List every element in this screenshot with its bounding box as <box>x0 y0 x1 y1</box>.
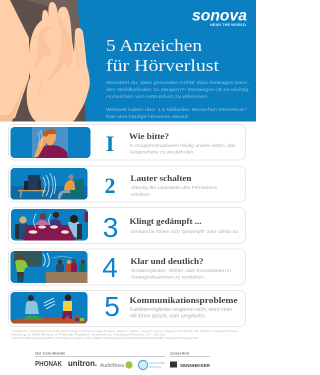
logo: Advanced Bionics <box>138 360 165 370</box>
intro text: den Wohlbefinden zu steigern?¹ Deswegen ist es wichtig, <box>106 87 250 93</box>
illustration: person cupping ear <box>10 127 90 158</box>
logo: Advanced Bionics: ADVANCED <box>149 361 165 365</box>
illustration: family communication <box>10 292 88 324</box>
illustration: dinner table group <box>11 209 88 240</box>
body text: Vortragssituationen zu verstehen. <box>131 274 205 280</box>
heading: Klingt gedämpft ... <box>130 217 202 226</box>
logo: sonova: sonova <box>192 8 247 24</box>
number 3: 3 <box>103 212 118 243</box>
illustration: hand cupped behind ear <box>0 0 90 122</box>
logo: Advanced Bionics: BIONICS <box>149 365 161 369</box>
heading: Wie bitte? <box>129 132 169 141</box>
card 1 <box>8 124 246 160</box>
title <box>106 36 219 75</box>
illustration: lecture room <box>10 251 88 283</box>
body text: mit ihnen spricht, oder umgekehrt. <box>130 314 206 320</box>
heading: Klar und deutlich? <box>130 257 204 266</box>
logo: unitron: unitron. <box>68 359 97 368</box>
card 5 <box>8 290 246 326</box>
card 2 <box>8 166 246 202</box>
brands: licensed brand: Licensed Brand <box>170 350 189 356</box>
body text: In Gruppensituationen häufig andere bitten, das <box>130 143 236 148</box>
brands: core brands <box>35 350 165 370</box>
logo: sonova: HEAR THE WORLD <box>210 23 246 27</box>
number 5: 5 <box>104 291 120 322</box>
logo: Sennheiser: SENNHEISER <box>180 363 211 368</box>
body text: Schwierigkeiten, Wörter oder Konsonanten in <box>131 268 232 273</box>
intro text: Weltweit haben über 1,5 Milliarden Menschen Hörverlust.² <box>106 107 247 113</box>
footnotes: Hearing is Well-Being: A Phonak Position Statement. Hearing Review, 27: 18-22. <box>11 332 166 336</box>
body text: Familienmitglieder reagieren nicht, wenn man <box>130 307 232 313</box>
brands: licensed brand <box>170 350 211 368</box>
card 3 <box>8 208 246 244</box>
footnotes <box>11 329 239 340</box>
logo: Phonak: PHONAK <box>35 361 62 368</box>
body text <box>131 268 232 280</box>
number 2: 2 <box>104 173 116 198</box>
logo: AudioNova: AudioNova <box>100 363 124 369</box>
footnotes: ¹ Vercammen C, Ferguson M, Kramer SE, Meis M, Singh G, Timmer B, Gagné JP, Goy H, Hickson L, Holube I, Launer S, Lemke U, Naylor G, Pichora-Fuller MK, Schlüter A, Weinstein B, Wong L. <box>11 329 239 333</box>
header banner <box>0 0 256 122</box>
body text: Geräusche fühlen sich "gedämpft" oder unklar an. <box>130 229 240 234</box>
intro text: Anzeichen von Hörverlust zu erkennen. <box>106 94 209 100</box>
intro text: Das sind häufige Hinweise darauf: <box>106 114 189 120</box>
body text <box>130 143 236 154</box>
illustration: loud television <box>10 168 88 200</box>
heading: Kommunikationsprobleme <box>130 296 238 305</box>
brands heading: Our Core Brands <box>35 350 65 356</box>
body text: Ständig die Lautstärke des Fernsehers <box>131 185 218 190</box>
number 4: 4 <box>102 252 118 283</box>
card 4 <box>8 249 246 285</box>
heading: Lauter schalten <box>130 174 192 183</box>
intro text <box>106 80 250 120</box>
body text: erhöhen. <box>131 192 151 197</box>
body text <box>131 185 218 197</box>
body text: Gesprochene zu wiederholen. <box>130 150 194 154</box>
body text <box>130 307 232 320</box>
number 1: I <box>106 131 114 156</box>
footnotes: ² The World Health Organization (WHO). World Report on Hearing. 2021. Available: https://www.who.int/publications/i/item/9789240020481. Last accessed: February 2024. <box>11 336 199 340</box>
title: für Hörverlust <box>106 56 219 75</box>
intro text: Wusstest du, dass gesundes Gehör dazu beitragen kann, <box>106 80 249 86</box>
title: 5 Anzeichen <box>106 36 202 55</box>
